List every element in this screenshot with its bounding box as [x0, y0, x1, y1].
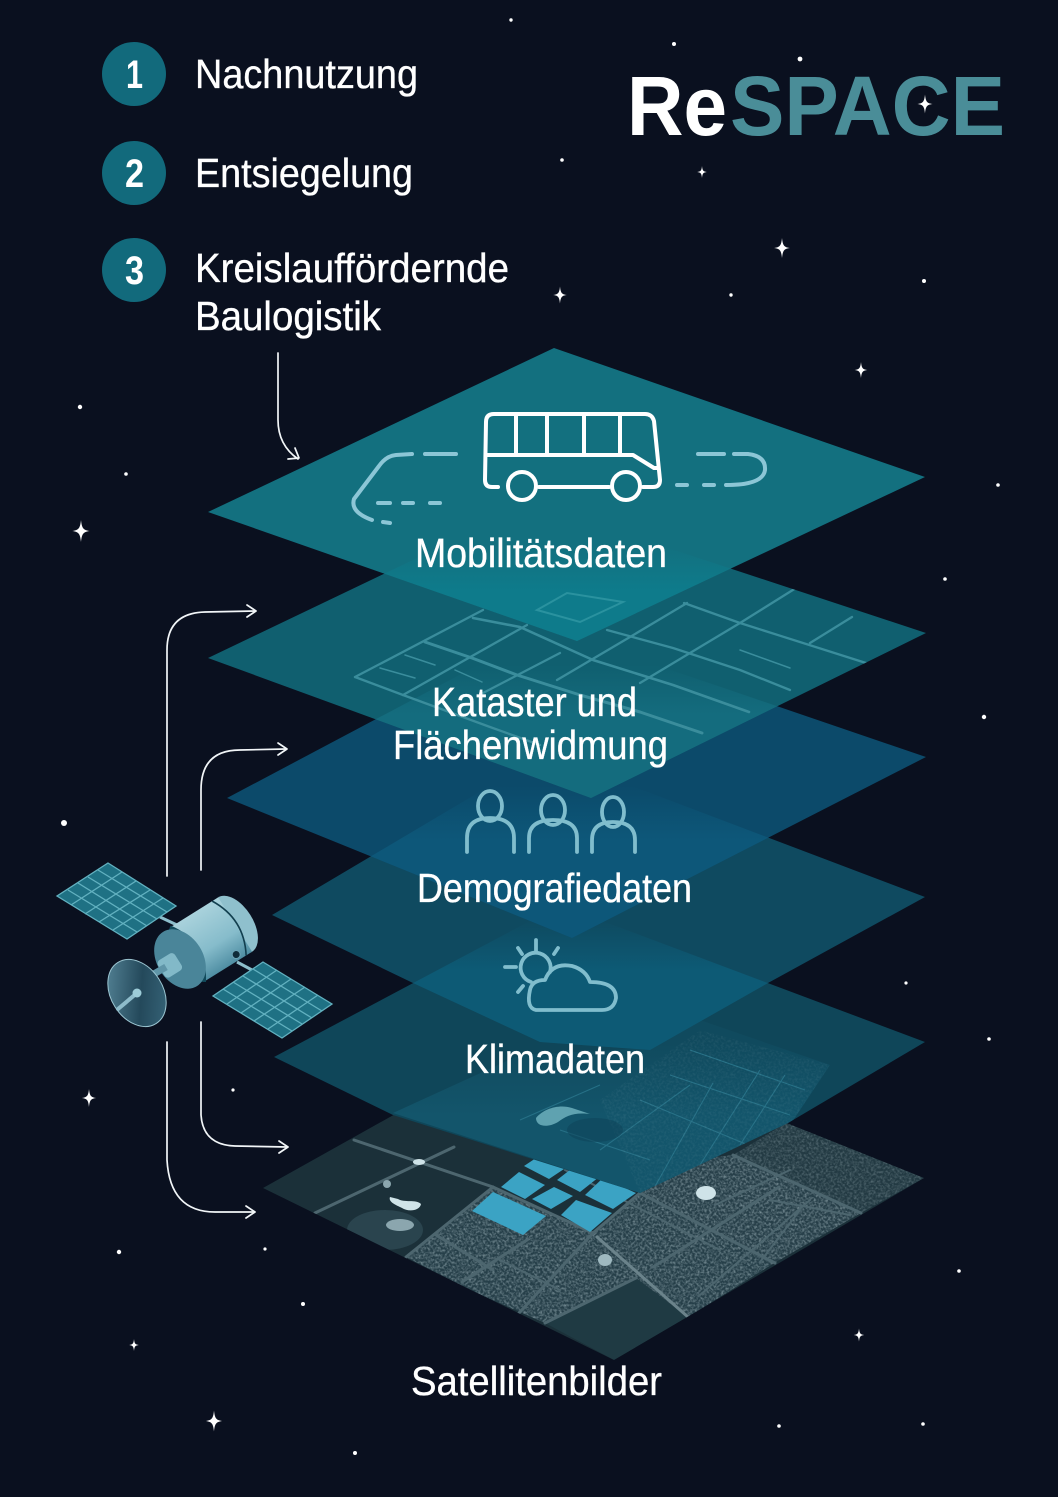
satellite illustration [57, 863, 332, 1038]
list item 3: Kreislauffördernde Baulogistik: Baulogistik [195, 293, 381, 339]
list item 1: Nachnutzung [102, 42, 418, 106]
layer: Klimadaten base plane [274, 905, 925, 1193]
label: Mobilitätsdaten: Mobilitätsdaten [415, 530, 667, 576]
layer: Demografie plane [227, 706, 926, 938]
label: Kataster und Flächenwidmung: Kataster und [432, 679, 637, 725]
layer: Satellitenbilder map [264, 1115, 924, 1360]
arrow: to Mobilität layer [278, 353, 299, 459]
arrow: satellite to Satellitenbilder layer [167, 1042, 255, 1218]
list item 2: Entsiegelung: 2 [125, 152, 144, 196]
layer: Kataster plane [208, 568, 926, 798]
label: Kataster und Flächenwidmung: Flächenwidmung [393, 722, 668, 768]
list item 3: Kreislauffördernde Baulogistik [102, 238, 509, 339]
solar panel left [57, 863, 176, 939]
lake [536, 1106, 590, 1126]
layer: weather plane [272, 838, 925, 1050]
list item 3: Kreislauffördernde Baulogistik: Kreislauffördernde [195, 245, 509, 291]
list item 2: Entsiegelung [102, 141, 413, 205]
cadastre street grid [355, 588, 866, 745]
label: Kataster und Flächenwidmung [393, 679, 668, 768]
icon: dashed route right of bus [677, 454, 765, 485]
label: Satellitenbilder: Satellitenbilder [411, 1358, 662, 1404]
icon: sun and cloud [505, 940, 616, 1010]
satellite map showing through the lower plane [393, 1020, 830, 1193]
arrow: satellite to Klima layer [201, 1022, 288, 1153]
logo: ReSPACE: Re [627, 59, 727, 153]
label: Klimadaten: Klimadaten [465, 1036, 645, 1082]
logo: ReSPACE: SPACE [730, 59, 1005, 153]
icon: dashed route left of bus [353, 454, 456, 523]
list item 1: Nachnutzung: Nachnutzung [195, 51, 418, 97]
icon: bus [485, 414, 660, 500]
cylinder body [144, 888, 267, 998]
list item 3: Kreislauffördernde Baulogistik: 3 [125, 249, 144, 293]
dish antenna [96, 949, 178, 1037]
arrow: satellite to Demografie layer [201, 743, 287, 870]
light water bodies [383, 1159, 716, 1266]
list item 2: Entsiegelung: Entsiegelung [195, 150, 413, 196]
layer: Mobilität plane [208, 348, 925, 641]
label: Demografiedaten: Demografiedaten [417, 865, 692, 911]
list item 1: Nachnutzung: 1 [126, 53, 143, 97]
blue highlighted plots [472, 1152, 636, 1235]
icon: people [467, 791, 635, 852]
solar panel arms [160, 917, 252, 970]
solar panel right [213, 962, 332, 1038]
arrow: satellite to Kataster layer [167, 605, 256, 876]
